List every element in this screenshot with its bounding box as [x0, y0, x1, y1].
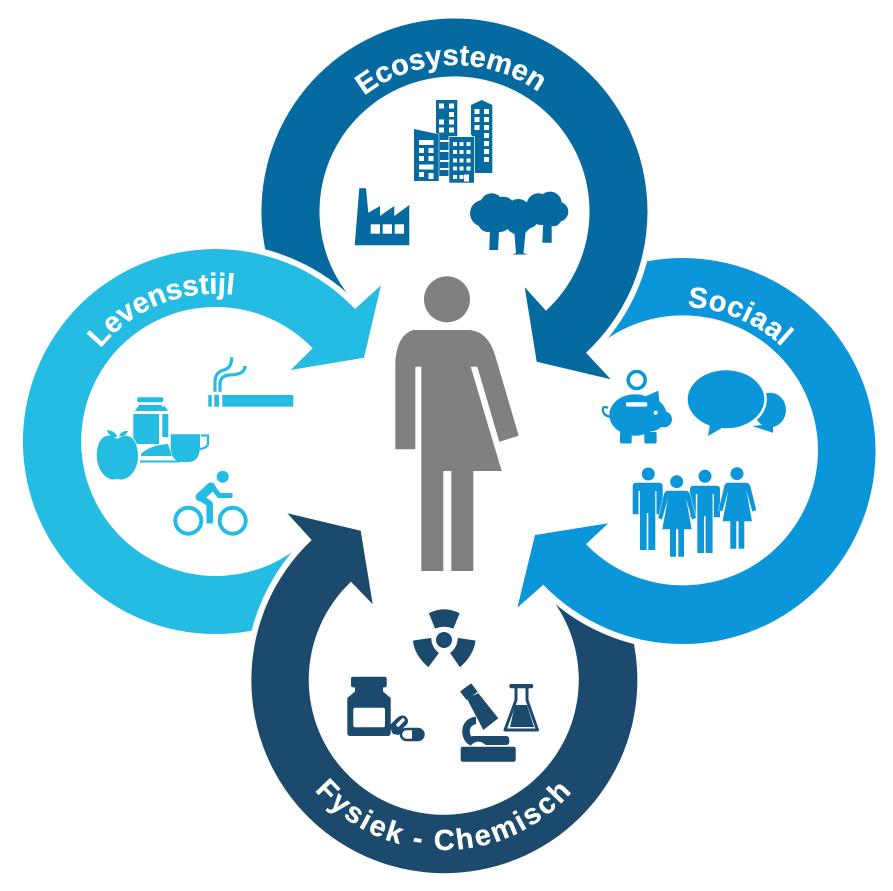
icon: piggy bank — [603, 372, 672, 444]
panel: Levensstijl ring arrow — [22, 249, 381, 634]
heading: Ecosystemen: Ecosystemen — [354, 46, 544, 95]
ring arrow: Fysiek - Chemisch — [251, 513, 637, 873]
icon: microscope — [461, 684, 516, 762]
ring arrow: Levensstijl — [23, 249, 381, 634]
icon: medicine bottle and pills — [347, 677, 424, 740]
ring arrow: Ecosystemen — [261, 18, 647, 379]
icon: speech bubbles — [688, 370, 786, 436]
icon: central person — [395, 276, 519, 571]
panel: Sociaal ring arrow — [517, 258, 876, 644]
icon: trees — [470, 192, 568, 254]
icon: city buildings — [414, 100, 492, 183]
panel: Ecosystemen ring arrow — [261, 18, 648, 294]
ring arrow: Sociaal — [517, 258, 876, 644]
heading: Fysiek - Chemisch: Fysiek - Chemisch — [316, 778, 571, 850]
icon: cyclist — [175, 471, 246, 534]
icon: food and drink — [97, 397, 208, 480]
panel: Fysiek - Chemisch ring arrow — [251, 513, 638, 874]
icon: group of people — [633, 467, 756, 557]
heading: Sociaal: Sociaal — [688, 287, 794, 346]
icon: radiation symbol — [414, 610, 475, 666]
icon: factory — [355, 188, 409, 245]
arrowhead: Ecosystemen overlapping Sociaal — [530, 200, 648, 372]
icon: cigarette with smoke — [208, 357, 293, 407]
heading: Levensstijl: Levensstijl — [86, 272, 234, 348]
icon: lab flask — [505, 684, 538, 730]
